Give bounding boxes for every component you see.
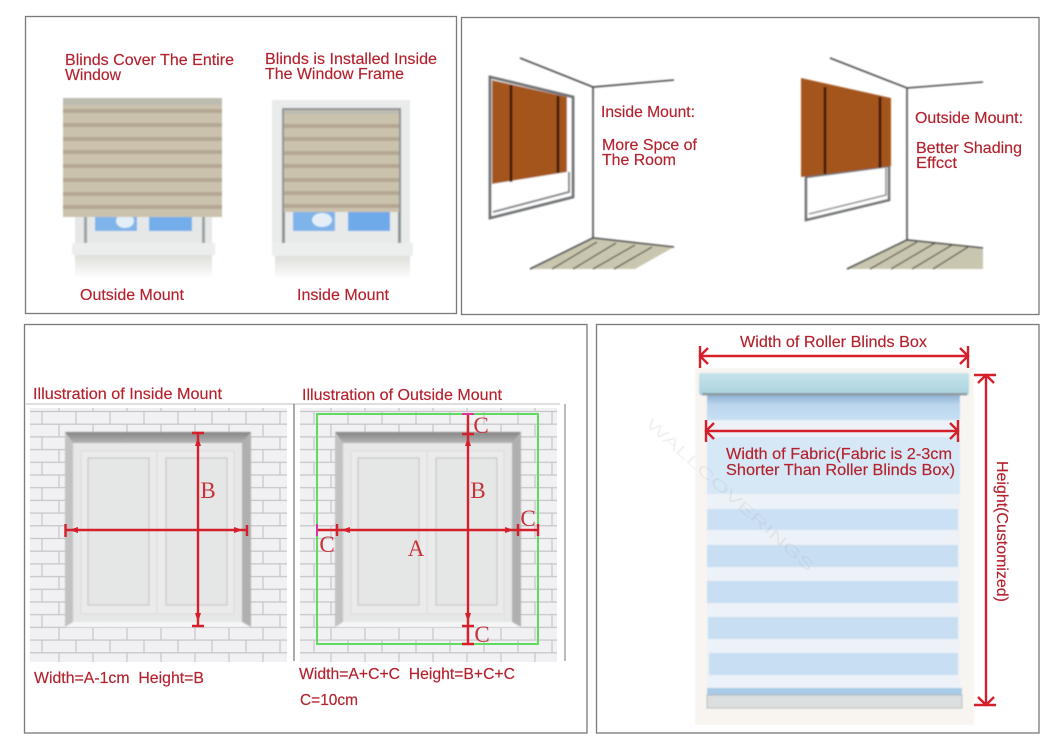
label: width of fabric: Width of Fabric(Fabric is 2-3cm (726, 446, 952, 463)
label: width of roller blinds box: Width of Roller Blinds Box (740, 334, 927, 351)
illustration: room with inside mount blind (490, 58, 674, 269)
arrow: height (974, 375, 996, 705)
arrow: width of fabric (706, 420, 958, 442)
diagram: outside mount measurement: C (319, 532, 335, 557)
heading: blinds installed inside the window frame: Blinds is Installed Inside (265, 51, 437, 68)
text: outside mount benefit: Outside Mount: (915, 110, 1023, 127)
diagram: inside mount measurement: B (200, 478, 216, 503)
caption: outside mount: Outside Mount (80, 287, 185, 304)
formula: outside mount size: Width=A+C+C Height=B+C+C (299, 666, 515, 683)
text: inside mount benefit: The Room (602, 152, 676, 169)
heading: blinds cover the entire window: Blinds Cover The Entire (65, 52, 234, 69)
panel: room perspective inside and outside mount (462, 18, 1039, 314)
diagram: outside mount measurement: A (408, 536, 425, 561)
illustration: blue zebra roller blind (695, 368, 974, 725)
text: outside mount benefit: Better Shading (916, 140, 1022, 157)
diagram: outside mount measurement: C (474, 622, 490, 647)
heading: illustration of inside mount: Illustration of Inside Mount (33, 386, 223, 403)
heading: blinds cover the entire window: Window (65, 67, 122, 84)
diagram: outside mount measurement (300, 408, 557, 662)
arrow: width of roller blinds box (700, 346, 968, 368)
illustration: inside mount window with beige blind (272, 100, 413, 278)
text: inside mount benefit: More Spce of (602, 137, 698, 154)
panel: roller blinds dimensions (596, 324, 1039, 733)
label: height customized: Height(Customized) (993, 461, 1010, 602)
panel: blinds cover window vs inside frame (26, 16, 456, 314)
watermark: WALLCOVERINGS (642, 415, 817, 575)
formula: inside mount size: Width=A-1cm Height=B (34, 670, 204, 687)
illustration: room with outside mount blind (801, 58, 983, 269)
label: width of fabric: Shorter Than Roller Blinds Box) (726, 462, 955, 479)
panel: measuring illustrations (24, 324, 587, 733)
heading: illustration of outside mount: Illustration of Outside Mount (302, 387, 503, 404)
diagram: outside mount measurement: C (520, 506, 536, 531)
formula: C value: C=10cm (300, 692, 358, 709)
caption: inside mount: Inside Mount (297, 287, 390, 304)
diagram: outside mount measurement: C (473, 413, 489, 438)
heading: blinds installed inside the window frame: The Window Frame (265, 66, 404, 83)
illustration: outside mount window with beige blind (63, 98, 222, 277)
text: outside mount benefit: Effcct (916, 155, 958, 172)
diagram: inside mount measurement (30, 408, 287, 662)
diagram: outside mount measurement: B (470, 478, 486, 503)
text: inside mount benefit: Inside Mount: (601, 104, 695, 121)
